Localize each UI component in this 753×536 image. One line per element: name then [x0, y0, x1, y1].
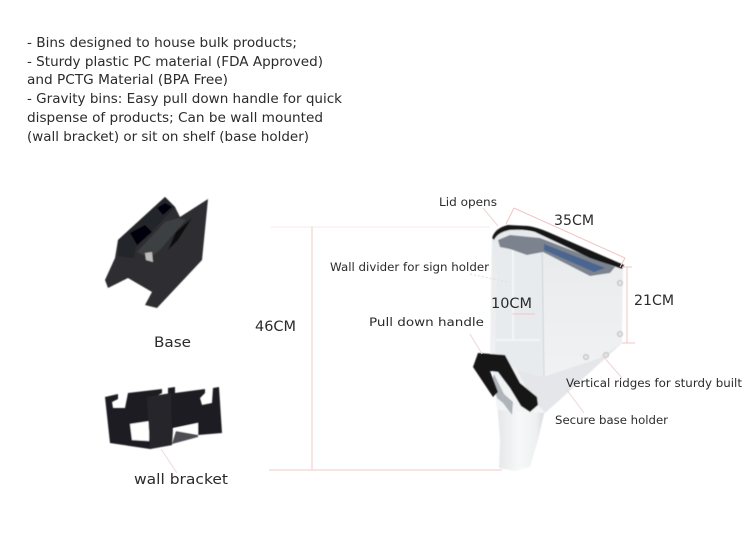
bin black lid: [492, 225, 624, 269]
pointer lines: [470, 208, 622, 413]
label: 10CM: 10CM: [491, 296, 532, 312]
label: Vertical ridges for sturdy built: Vertical ridges for sturdy built: [566, 377, 743, 390]
description text block: - Gravity bins: Easy pull down handle for quick: [27, 92, 342, 107]
description text block: [27, 36, 342, 145]
label: Pull down handle: Pull down handle: [369, 316, 484, 329]
label: 35CM: 35CM: [554, 213, 594, 229]
label: 46CM: 46CM: [255, 319, 296, 335]
dimension lines: 46CM height: [269, 227, 502, 470]
bin channel: [495, 250, 543, 377]
label: Secure base holder: Secure base holder: [555, 414, 668, 427]
dimension lines: bin: [506, 208, 635, 343]
bin body: [490, 228, 623, 413]
description text block: dispense of products; Can be wall mounted: [27, 111, 323, 126]
pointer line: wall bracket: [161, 449, 177, 473]
label: 21CM: 21CM: [634, 293, 674, 309]
label: Lid opens: Lid opens: [439, 196, 497, 209]
bin spout: [497, 400, 546, 471]
label: wall bracket: wall bracket: [134, 472, 228, 488]
icon: base holder: [105, 197, 208, 308]
bin screws: [584, 280, 622, 360]
description text block: and PCTG Material (BPA Free): [27, 73, 228, 88]
label: Wall divider for sign holder: Wall divider for sign holder: [330, 261, 489, 274]
handle pivot: [492, 374, 513, 415]
handle: [473, 353, 538, 412]
bin inner shadow: [498, 235, 615, 276]
icon: wall bracket: [105, 387, 222, 449]
gravity bin product: [473, 225, 624, 471]
description text block: - Bins designed to house bulk products;: [27, 36, 297, 51]
description text block: - Sturdy plastic PC material (FDA Approved): [27, 55, 323, 70]
description text block: (wall bracket) or sit on shelf (base holder): [27, 130, 309, 145]
label: Base: Base: [154, 335, 191, 351]
